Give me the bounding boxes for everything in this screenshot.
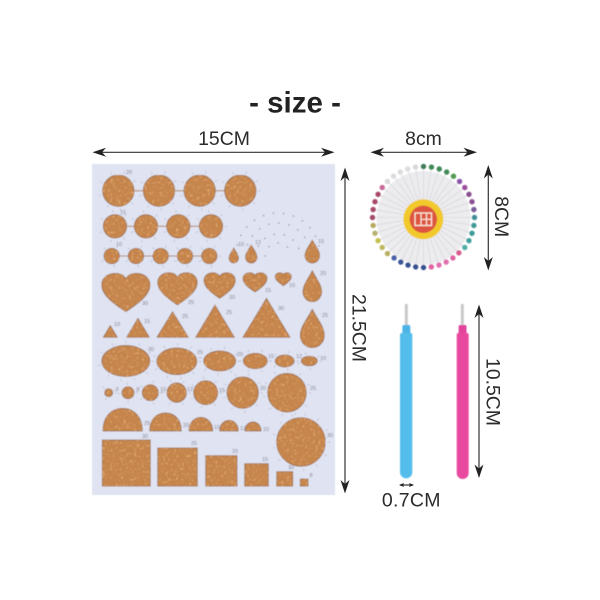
big circle xyxy=(277,418,325,466)
panel: quilling template board xyxy=(92,164,335,495)
dimension: board height 21.5CM: 21.5CM xyxy=(348,294,370,362)
icon: pink quilling tool xyxy=(457,304,469,479)
size numbers on board: 20 xyxy=(229,295,235,301)
dimension: board width 15CM: 15CM xyxy=(198,128,250,150)
size numbers on board: 20 xyxy=(237,352,243,358)
dimension: tool length 10.5CM xyxy=(474,304,504,478)
size numbers on board: 10 xyxy=(114,322,120,328)
row: graded circles xyxy=(105,373,306,412)
size numbers on board: 25 xyxy=(191,441,197,447)
size numbers on board: 30 xyxy=(142,434,148,440)
dotted arc guides xyxy=(236,213,320,256)
row: hearts xyxy=(102,273,291,312)
size numbers on board: 20 xyxy=(320,271,326,277)
size numbers on board xyxy=(114,170,333,479)
size numbers on board: 20 xyxy=(260,386,266,392)
size numbers on board: 30 xyxy=(327,433,333,439)
size numbers on board: 15 xyxy=(262,457,268,463)
icon: circular pin wheel xyxy=(370,164,477,270)
size numbers on board: 25 xyxy=(322,313,328,319)
size numbers on board: 15 xyxy=(265,288,271,294)
red hub label xyxy=(410,206,437,233)
size numbers on board: 20 xyxy=(183,423,189,429)
size numbers on board: 12 xyxy=(187,387,193,393)
dimension: tool diameter 0.7CM: 0.7CM xyxy=(382,490,441,512)
size numbers on board: 12 xyxy=(255,240,261,246)
size numbers on board: 25 xyxy=(188,300,194,306)
title: - size - xyxy=(249,86,341,119)
size numbers on board: 30 xyxy=(142,301,148,307)
dimension: pin wheel height 8CM: 8CM xyxy=(490,196,512,237)
dimension: board height 21.5CM xyxy=(340,168,370,494)
icon: blue quilling tool xyxy=(400,304,412,478)
dimension: board width 15CM xyxy=(92,128,334,157)
row: semicircles xyxy=(103,408,261,431)
size numbers on board: 25 xyxy=(226,310,232,316)
dimension: pin wheel height 8CM xyxy=(484,165,512,270)
size numbers on board: 30 xyxy=(148,347,154,353)
size numbers on board: 20 xyxy=(126,170,132,176)
size numbers on board: 15 xyxy=(144,319,150,325)
row: large circles xyxy=(103,175,256,206)
board background xyxy=(92,164,335,495)
size numbers on board: 10 xyxy=(288,465,294,471)
size numbers on board: 12 xyxy=(296,354,302,360)
size numbers on board: 8 xyxy=(136,387,140,393)
size numbers on board: 10 xyxy=(160,387,166,393)
size numbers on board: 25 xyxy=(197,350,203,356)
wheel disc xyxy=(376,171,470,265)
size numbers on board: 15 xyxy=(268,354,274,360)
size numbers on board: 20 xyxy=(232,449,238,455)
size numbers on board: 8 xyxy=(309,473,313,479)
connector lines between circles xyxy=(111,191,240,256)
size numbers on board: 10 xyxy=(238,242,244,248)
size numbers on board: 25 xyxy=(182,314,188,320)
pins xyxy=(370,164,477,270)
row: squares xyxy=(102,440,308,486)
size numbers on board: 15 xyxy=(219,388,225,394)
dimension: pin wheel width 8cm xyxy=(370,128,477,157)
size numbers on board: 10 xyxy=(116,242,122,248)
size numbers on board: 12 xyxy=(240,426,246,432)
size numbers on board: 25 xyxy=(310,386,316,392)
row: medium circles xyxy=(103,215,223,238)
row: ellipses xyxy=(102,346,317,376)
yellow hub xyxy=(403,199,443,239)
size numbers on board: 15 xyxy=(214,425,220,431)
size numbers on board: 10 xyxy=(320,356,326,362)
teardrops xyxy=(229,240,324,348)
cork cut-outs xyxy=(102,175,325,486)
guide ticks around shapes xyxy=(99,172,329,470)
dimension: tool length 10.5CM: 10.5CM xyxy=(482,358,504,426)
size numbers on board: 30 xyxy=(278,306,284,312)
size numbers on board: 10 xyxy=(263,427,269,433)
size numbers on board: 15 xyxy=(120,210,126,216)
dimension: pin wheel width 8cm: 8cm xyxy=(405,128,442,150)
row: small circles xyxy=(104,248,217,264)
size numbers on board: 25 xyxy=(144,421,150,427)
size numbers on board: 3 xyxy=(115,387,119,393)
row: triangles xyxy=(103,298,290,337)
size numbers on board: 10 xyxy=(289,283,295,289)
size numbers on board: 15 xyxy=(318,239,324,245)
